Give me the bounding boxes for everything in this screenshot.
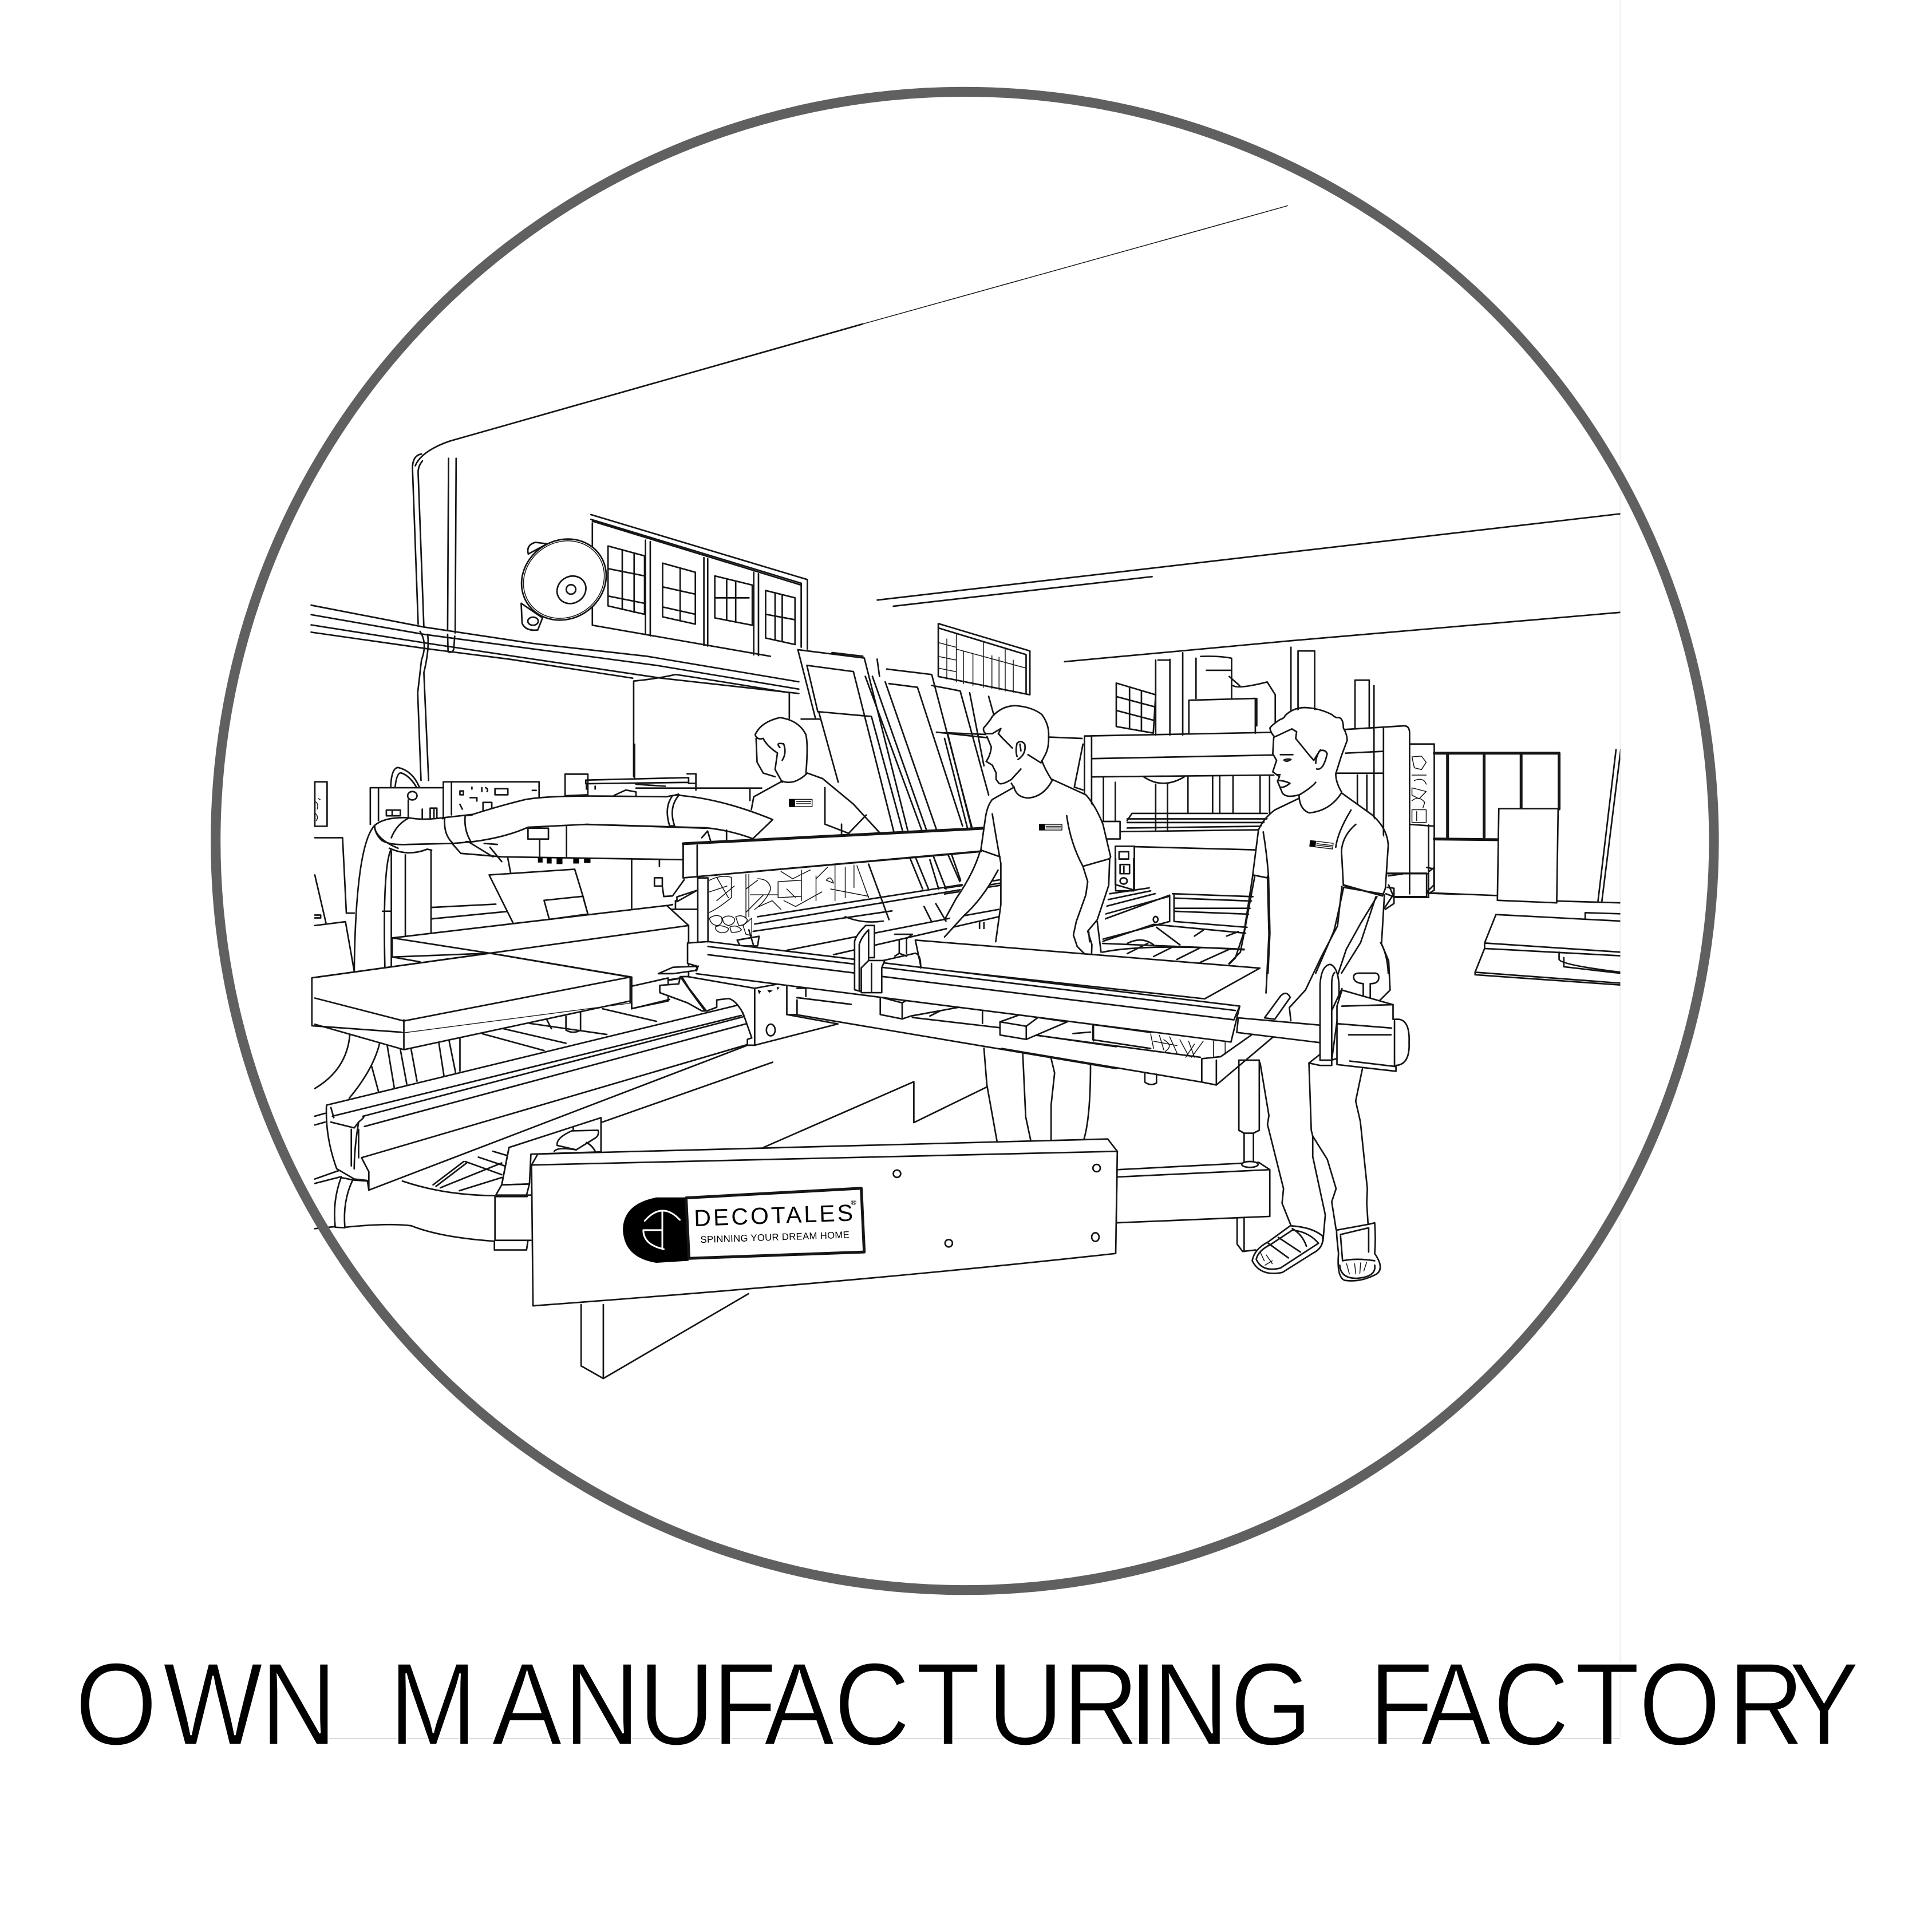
icon: wall fan	[520, 538, 607, 631]
back window, storage box and floor stacks	[1433, 749, 1621, 985]
sliding fence with mosaic slab behind	[658, 828, 1000, 974]
right worker legs and sandals	[1230, 875, 1390, 1241]
back worker	[752, 718, 882, 835]
window with wall fan	[512, 515, 807, 656]
icon: logo mark	[643, 1211, 680, 1249]
sandals	[1252, 1223, 1380, 1281]
centre worker legs and floor zigzag	[764, 1048, 1091, 1147]
far windows and back machinery	[938, 623, 1374, 735]
circle frame	[216, 92, 1714, 1590]
ceiling lines	[415, 206, 1620, 662]
control boxes and wall signage	[315, 744, 761, 971]
table saw post and cross beam	[1116, 1060, 1270, 1251]
sliding rail and lower duct	[315, 1005, 773, 1250]
miter bar handle and motor	[1237, 965, 1409, 1071]
leaning boards	[634, 650, 997, 833]
icon: right sandal	[1337, 1223, 1380, 1281]
right worker torso	[1229, 708, 1402, 973]
press bed	[1098, 859, 1460, 962]
work tables and slabs	[312, 906, 689, 1033]
back press detail behind centre worker	[945, 733, 1083, 894]
DECOTALES logo badge: ®	[851, 1198, 856, 1207]
wall pipes and overhead beams	[311, 454, 799, 780]
workpiece board, fence rail and clamps	[696, 926, 1260, 1042]
under-table frame, hoses and legs	[315, 999, 670, 1098]
icon: left sandal	[1252, 1226, 1323, 1274]
back press machine and doorway	[1084, 726, 1435, 898]
factory scene illustration	[311, 206, 1621, 1378]
DECOTALES logo badge: DECOTALES	[694, 1199, 854, 1231]
carriage block and table frame	[660, 942, 1116, 1069]
DECOTALES logo badge	[623, 1188, 864, 1263]
panel lower brace	[581, 1294, 748, 1378]
dust extraction duct	[354, 794, 773, 971]
DECOTALES logo badge: SPINNING YOUR DREAM HOME	[700, 1230, 850, 1245]
back floor line	[1428, 893, 1460, 894]
front logo panel	[532, 1139, 1117, 1306]
title: OWN MANUFACTURING FACTORY	[75, 1639, 1859, 1770]
centre worker torso	[945, 706, 1111, 955]
